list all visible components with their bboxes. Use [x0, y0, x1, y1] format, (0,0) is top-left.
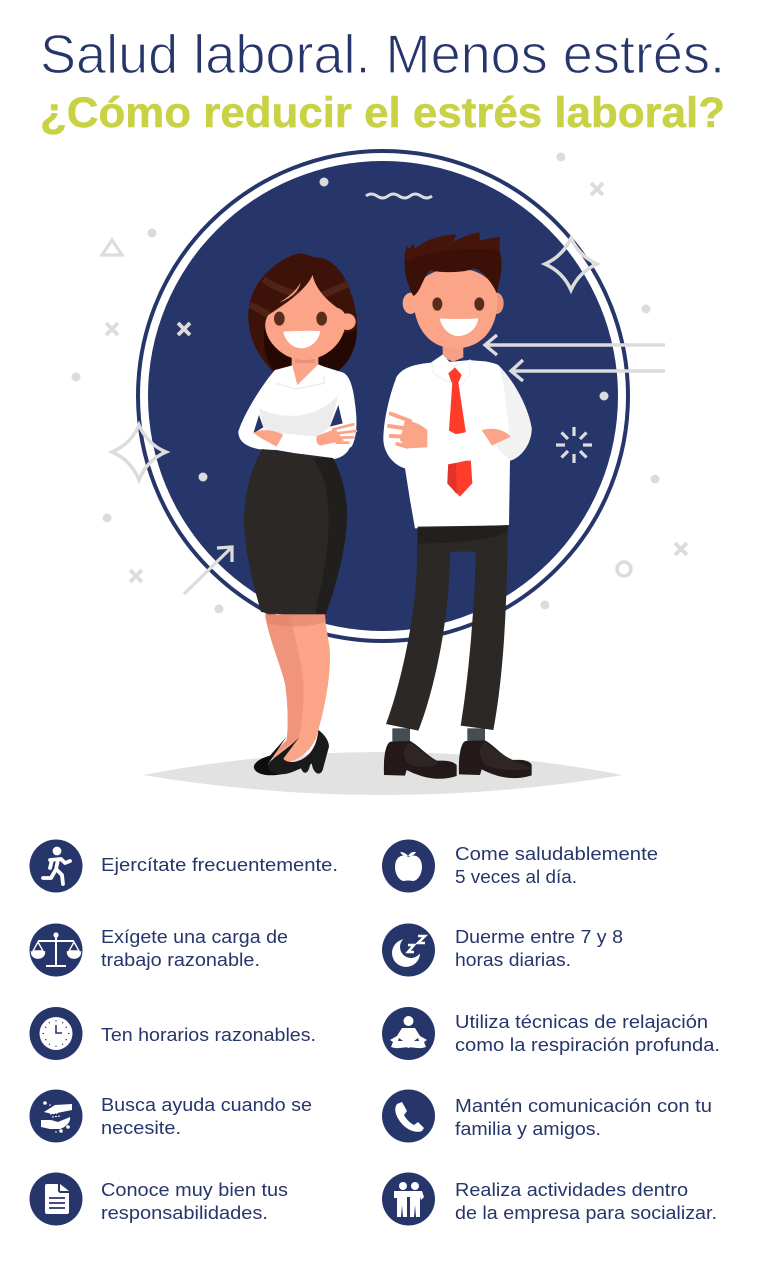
woman right hand — [316, 424, 356, 446]
text — [455, 1011, 720, 1055]
icon: clock — [30, 1007, 82, 1060]
diagonal arrow — [184, 547, 232, 594]
woman leg shadow — [265, 614, 303, 757]
man belt shade — [418, 525, 508, 543]
text — [455, 1095, 712, 1139]
text: responsabilidades. — [101, 1202, 268, 1223]
text: 5 veces al día. — [455, 866, 577, 887]
woman hair shadow — [264, 327, 357, 372]
woman neck — [292, 353, 318, 385]
sparkle right — [545, 238, 597, 290]
woman figure — [238, 253, 357, 459]
man collar — [432, 355, 470, 384]
woman collar lines — [276, 375, 324, 389]
title: Salud laboral. Menos estrés. — [40, 23, 725, 85]
text — [101, 1179, 288, 1223]
text: Mantén comunicación con tu — [455, 1095, 712, 1116]
woman fringe strand — [279, 283, 301, 303]
man crossed arm — [387, 429, 510, 468]
background circle — [138, 151, 628, 641]
man shirt and tie — [383, 355, 532, 528]
woman face — [265, 275, 346, 360]
icon: meditation — [382, 1007, 435, 1060]
sunburst — [556, 427, 592, 463]
tip: responsibilities — [30, 1172, 288, 1226]
man hair — [404, 232, 502, 296]
tip: communication — [382, 1090, 712, 1142]
arrows pointing left — [485, 335, 665, 381]
text: Come saludablemente — [455, 843, 658, 864]
woman eyes — [274, 312, 327, 326]
text — [455, 1179, 717, 1223]
lower bodies — [254, 525, 532, 779]
tip: sleep — [382, 924, 623, 976]
text: Realiza actividades dentro — [455, 1179, 688, 1200]
text: Ejercítate frecuentemente. — [101, 854, 338, 875]
woman left hand — [253, 430, 283, 447]
man neck — [443, 342, 463, 362]
tip: eat healthy — [382, 840, 658, 892]
icon: scales — [30, 924, 82, 976]
man mouth — [440, 318, 478, 336]
man hair top tone — [404, 232, 500, 262]
tie — [447, 367, 472, 497]
tip: socialize — [382, 1172, 717, 1226]
tip: schedule — [30, 1007, 316, 1060]
woman ear — [339, 313, 356, 330]
tip: seek help — [30, 1090, 312, 1142]
woman neck shadow — [295, 357, 315, 363]
woman back shoe — [254, 737, 288, 775]
icon: hands — [30, 1090, 82, 1142]
text: trabajo razonable. — [101, 949, 260, 970]
text: Utiliza técnicas de relajación — [455, 1011, 708, 1032]
woman hair highlights — [250, 279, 348, 317]
woman front shoe — [267, 730, 329, 774]
decorative ring — [617, 562, 631, 576]
woman crossed sleeve — [277, 434, 351, 459]
text: Ten horarios razonables. — [101, 1024, 316, 1045]
man socks — [392, 728, 485, 743]
icon: moon — [382, 924, 435, 976]
man left shoe — [384, 741, 457, 779]
tip: exercise — [30, 840, 338, 892]
text: necesite. — [101, 1117, 181, 1138]
text: familia y amigos. — [455, 1118, 601, 1139]
text: Busca ayuda cuando se — [101, 1094, 312, 1115]
text: Exígete una carga de — [101, 926, 288, 947]
sparkle left — [112, 425, 166, 480]
woman blouse shadow — [259, 395, 338, 440]
text — [101, 1094, 312, 1138]
man shirt — [383, 360, 532, 528]
text: de la empresa para socializar. — [455, 1202, 717, 1223]
man right hand — [482, 429, 511, 446]
man eyes — [432, 297, 484, 311]
woman skirt — [244, 449, 347, 615]
woman hair back — [248, 253, 357, 372]
icon: runner — [30, 840, 82, 892]
man ears — [403, 293, 504, 314]
man trousers — [386, 525, 508, 731]
man face — [413, 268, 497, 348]
decorative crosses — [106, 183, 687, 582]
text — [101, 926, 288, 970]
icon: phone — [382, 1090, 435, 1142]
man figure upper body — [403, 232, 504, 362]
tip: relaxation — [382, 1007, 720, 1060]
icon: two people — [382, 1172, 435, 1226]
decorative wave — [366, 194, 432, 198]
icon: apple — [382, 840, 435, 892]
woman legs — [265, 614, 330, 763]
text — [455, 843, 658, 887]
woman blouse — [238, 364, 356, 459]
text: Duerme entre 7 y 8 — [455, 926, 623, 947]
text: Conoce muy bien tus — [101, 1179, 288, 1200]
man sleeve shadow — [480, 367, 532, 461]
woman mouth — [283, 331, 320, 348]
skirt cast shadow — [265, 614, 326, 627]
navy gaps beside torso — [253, 405, 343, 433]
man left hand — [389, 414, 427, 448]
decorative triangle — [102, 240, 122, 255]
man right shoe — [459, 740, 532, 778]
text — [455, 926, 623, 970]
subtitle: ¿Cómo reducir el estrés laboral? — [40, 89, 725, 137]
tip: workload — [30, 924, 288, 976]
text: horas diarias. — [455, 949, 571, 970]
ground shadow — [143, 752, 623, 795]
decorative dots — [72, 152, 660, 614]
icon: document — [30, 1172, 82, 1226]
text: como la respiración profunda. — [455, 1034, 720, 1055]
